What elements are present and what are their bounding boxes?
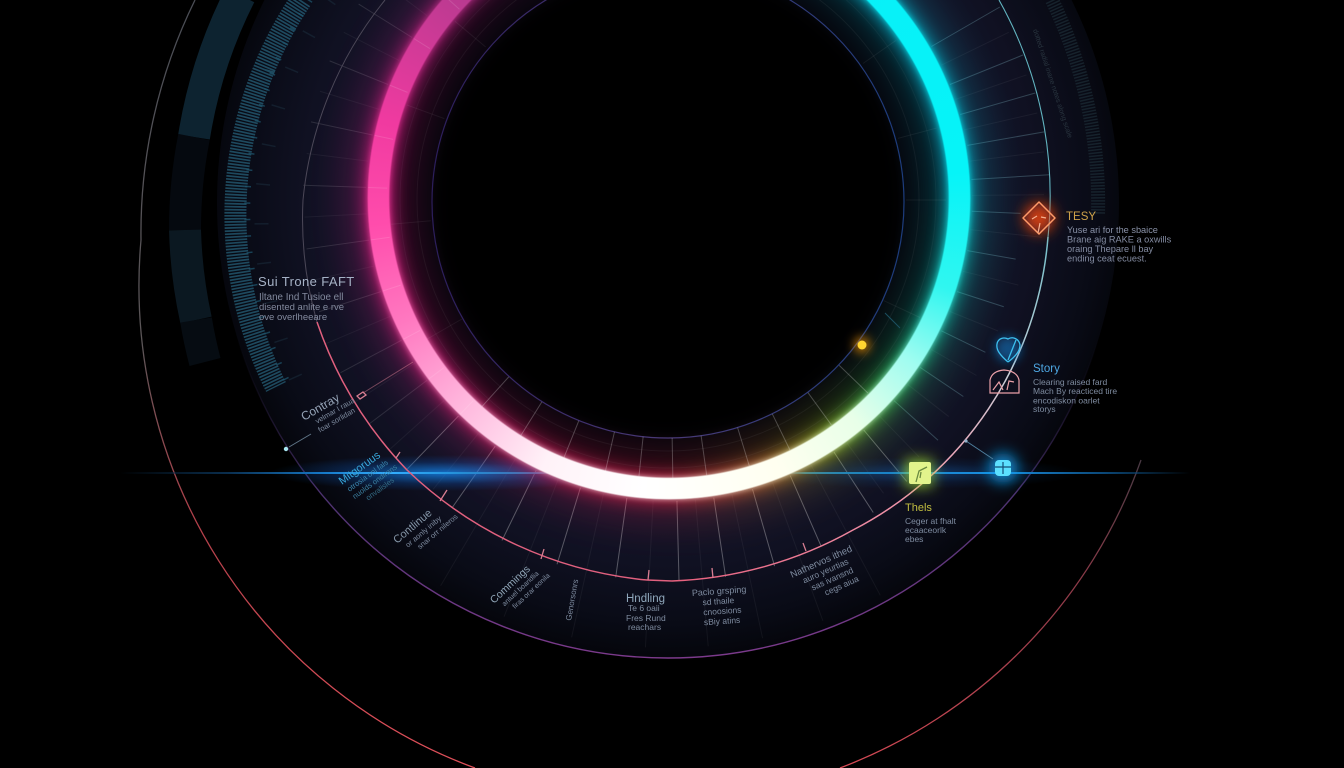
text: Hndling	[626, 593, 666, 632]
icon: blue heart	[995, 336, 1021, 362]
panel: outer dim band	[185, 0, 240, 362]
text: vertical note: Genorsonrs	[564, 579, 580, 621]
text: TESY: Yuse ari for the sbaice	[1067, 225, 1158, 235]
icon: orange diamond	[1023, 202, 1055, 234]
icon: pink card	[990, 370, 1019, 393]
text: Hndling: Fres Rund	[626, 613, 666, 623]
text: Sui Trone FAFT: Sui Trone FAFT	[258, 274, 355, 289]
text: Sui Trone FAFT: Iltane Ind Tusioe ell	[259, 292, 343, 303]
text: Story	[1033, 363, 1117, 414]
horizontal blue light flare	[132, 456, 1184, 490]
text: Contray: Contray	[298, 390, 342, 424]
text: Continue: Contlinue	[391, 507, 435, 546]
text: TESY: oraing Thepare ll bay	[1067, 244, 1154, 254]
icon: cyan node	[964, 439, 1018, 483]
text: Pado block: sBiy atins	[704, 615, 741, 627]
text: Thels: ebes	[905, 534, 923, 544]
text: Continue: or aonly iniby	[404, 514, 443, 549]
text: Contray: velmar I raua	[314, 395, 357, 426]
text: TESY: TESY	[1066, 211, 1096, 223]
text: blue highlighted block: nuolds ondirans	[351, 462, 399, 501]
text: Nathervos block: cegs aiua	[823, 573, 860, 597]
outer thin arc right	[840, 460, 1141, 768]
text: blue highlighted block: onvalisles	[364, 475, 396, 502]
text: Contray	[298, 384, 361, 438]
text: Nathervos block	[789, 544, 866, 607]
text: Commings: firas orar eonila	[512, 572, 552, 610]
text: Nathervos block: auro yeurtias	[801, 556, 850, 585]
text: Commings: Commings	[488, 563, 533, 606]
text: TESY: ending ceat ecuest.	[1067, 254, 1147, 264]
timeline tick marks	[357, 362, 806, 580]
text: Commings	[488, 556, 552, 619]
text: Contray: foar sorlidan	[316, 406, 357, 434]
icon: left teal dot	[284, 434, 311, 451]
text: Thels: ecaaceorlk	[905, 525, 947, 535]
text: Pado block: cnoosions	[703, 605, 742, 617]
text: Thels	[905, 502, 957, 544]
text: Continue: snar orr nileros	[415, 512, 460, 551]
radial grid lines	[303, 0, 1049, 647]
text: Hndling: reachars	[628, 622, 661, 632]
chart: faint tick band right	[1052, 0, 1098, 215]
text: Pado block: Paclo grsping	[692, 584, 747, 598]
text: Continue	[391, 496, 460, 560]
text: Sui Trone FAFT	[258, 274, 355, 323]
text: Nathervos block: Nathervos ithed	[789, 544, 854, 581]
text: Story: storys	[1033, 404, 1056, 414]
main neon ring	[329, 0, 1007, 538]
text: Sui Trone FAFT: disented anlite e rve	[259, 302, 344, 313]
text: blue highlighted block	[337, 445, 404, 509]
text: Story: Clearing raised fard	[1033, 377, 1107, 387]
text: TESY	[1066, 211, 1172, 264]
text: TESY: Brane aig RAKE a oxwills	[1067, 234, 1172, 244]
text: blue highlighted block: Mitgoruus	[337, 449, 383, 487]
text: Hndling: Hndling	[626, 593, 665, 605]
text: Hndling: Te 6 oaii	[628, 603, 660, 613]
text: Nathervos block: sas ivansnd	[810, 565, 855, 592]
icon: yellow square	[905, 459, 933, 487]
text: Pado block	[692, 584, 749, 628]
ring segment lines	[368, 0, 473, 415]
text: Thels: Thels	[905, 502, 932, 514]
text: Pado block: sd thaile	[702, 595, 735, 607]
text: Story: Mach By reacticed tire	[1033, 386, 1117, 396]
text: blue highlighted block: otrosia onl fals	[345, 458, 390, 494]
icon: yellow dot	[854, 313, 900, 353]
outer thin arc left	[139, 0, 475, 768]
inner grid between orbit and ring	[391, 0, 946, 478]
text: Thels: Ceger at fhalt	[905, 516, 957, 526]
timeline arc	[303, 0, 1050, 581]
inner orbit circle	[432, 0, 904, 438]
panel: dial disc	[217, 0, 1119, 658]
text: Sui Trone FAFT: ove overlheeare	[259, 312, 327, 323]
text: Commings: antuel boaridlia	[501, 570, 541, 608]
text: faint rotated note right: dotted radial inane notes along scale	[1031, 28, 1073, 139]
chart: tick data band	[235, 0, 330, 387]
text: Story: Story	[1033, 363, 1060, 375]
text: Story: encodiskon oarlet	[1033, 396, 1100, 406]
